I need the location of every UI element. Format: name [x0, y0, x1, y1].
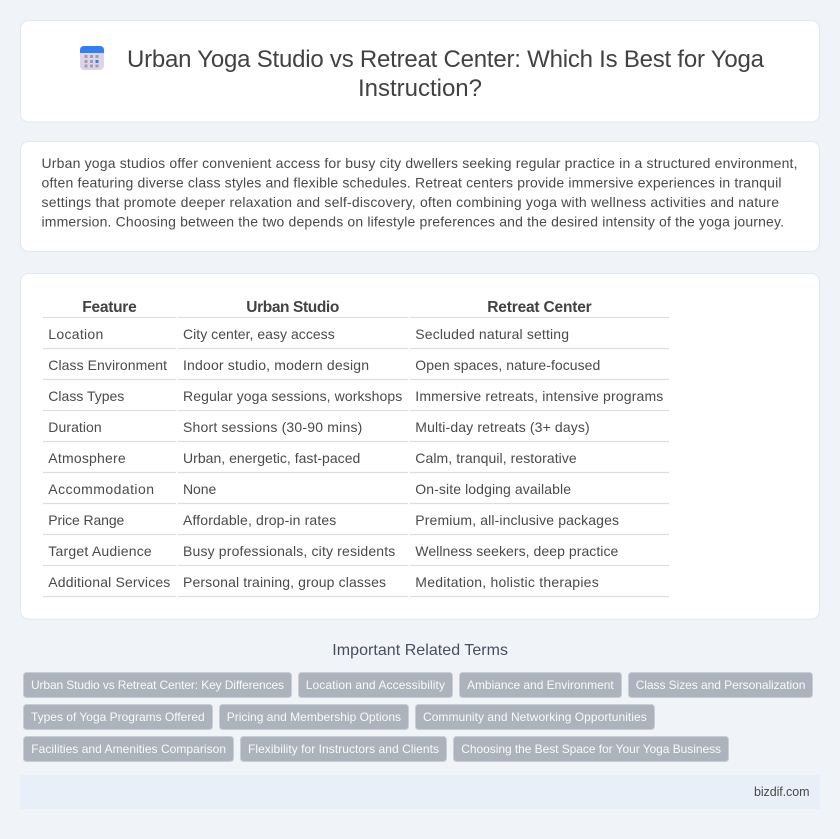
table row: Location: Location [48, 326, 103, 342]
table row: Accommodation: Accommodation [48, 481, 154, 497]
text block: introduction paragraph: immersion. Choosing between the two depends on lifestyle preferences and the desired intensity of the yoga journey. [42, 214, 784, 230]
table header row: Urban Studio [246, 299, 339, 316]
table row: Target Audience [43, 543, 669, 566]
tag [240, 736, 446, 762]
title: Instruction? [358, 75, 482, 102]
title [127, 46, 765, 102]
tag: Class Sizes and Personalization [636, 678, 805, 692]
table row: Class Environment [43, 357, 669, 380]
table row: Duration: Short sessions (30-90 mins) [183, 419, 362, 435]
table row: Class Types: Class Types [48, 388, 124, 404]
table row: Price Range: Premium, all-inclusive packages [415, 512, 619, 528]
table row: Additional Services: Additional Services [48, 574, 170, 590]
table row: Class Environment: Indoor studio, modern design [183, 357, 369, 373]
table row: Atmosphere [43, 450, 669, 472]
table row: Class Types [43, 388, 669, 410]
panel: header [20, 20, 820, 122]
table row: Price Range: Price Range [48, 512, 125, 528]
tag: Ambiance and Environment [467, 678, 614, 692]
table row: Class Types: Immersive retreats, intensive programs [415, 388, 663, 404]
tag: Facilities and Amenities Comparison [31, 742, 226, 756]
table row: Atmosphere: Calm, tranquil, restorative [415, 450, 577, 466]
table row: Class Types: Regular yoga sessions, workshops [183, 388, 402, 404]
table header row [43, 299, 669, 318]
table row: Price Range [43, 512, 669, 534]
tag [416, 704, 654, 730]
panel: comparison table [20, 274, 820, 619]
table row: Duration [43, 419, 669, 442]
text block: introduction paragraph: often featuring diverse class styles and flexible schedules. Retreat centers provide immersive experiences in tranquil [42, 174, 782, 190]
tag [24, 736, 234, 762]
text block: introduction paragraph [42, 155, 798, 230]
table row: Additional Services [43, 574, 669, 596]
text block: introduction paragraph: settings that promote deeper relaxation and self-discovery, often combining yoga with wellness activities and nature [42, 194, 779, 210]
table row: Class Environment: Open spaces, nature-focused [415, 357, 600, 373]
table row: Price Range: Affordable, drop-in rates [183, 512, 336, 528]
tag [24, 704, 212, 730]
table row: Accommodation: On-site lodging available [415, 481, 571, 497]
table row: Target Audience: Busy professionals, city residents [183, 543, 395, 559]
tag [460, 672, 622, 698]
title: Urban Yoga Studio vs Retreat Center: Which Is Best for Yoga [127, 46, 765, 73]
tag [628, 672, 812, 698]
table row: Duration: Duration [48, 419, 102, 435]
tag [298, 672, 452, 698]
tag: Pricing and Membership Options [227, 710, 401, 724]
table row: Additional Services: Meditation, holistic therapies [415, 574, 599, 590]
text block: introduction paragraph: Urban yoga studios offer convenient access for busy city dwellers seeking regular practice in a structured environment, [42, 155, 798, 171]
footer text: source: bizdif.com [754, 785, 810, 799]
table row: Location: City center, easy access [183, 326, 335, 342]
tag list: related terms [24, 672, 812, 762]
table header row: Retreat Center [487, 299, 592, 316]
table header row: Feature [82, 299, 137, 316]
footer bar [20, 775, 820, 809]
tag: Community and Networking Opportunities [423, 710, 647, 724]
table row: Accommodation: None [183, 481, 217, 497]
table row: Location: Secluded natural setting [415, 326, 569, 342]
table row: Atmosphere: Urban, energetic, fast-paced [183, 450, 360, 466]
tag [24, 672, 292, 698]
panel: introduction [20, 142, 820, 252]
icon: calendar [80, 46, 104, 70]
table row: Additional Services: Personal training, group classes [183, 574, 386, 590]
table row: Target Audience: Target Audience [48, 543, 152, 559]
tag: Urban Studio vs Retreat Center: Key Differences [31, 678, 284, 692]
tag: Location and Accessibility [306, 678, 445, 692]
tag: Choosing the Best Space for Your Yoga Business [461, 742, 721, 756]
tag: Flexibility for Instructors and Clients [248, 742, 439, 756]
table row: Location [43, 326, 669, 348]
heading: important related terms: Important Related Terms [332, 642, 508, 659]
tag [454, 736, 728, 762]
tag: Types of Yoga Programs Offered [31, 710, 205, 724]
table row: Class Environment: Class Environment [48, 357, 167, 373]
table row: Target Audience: Wellness seekers, deep practice [415, 543, 619, 559]
tag [220, 704, 408, 730]
table row: Duration: Multi-day retreats (3+ days) [415, 419, 590, 435]
table row: Accommodation [43, 481, 669, 504]
table row: Atmosphere: Atmosphere [48, 450, 126, 466]
